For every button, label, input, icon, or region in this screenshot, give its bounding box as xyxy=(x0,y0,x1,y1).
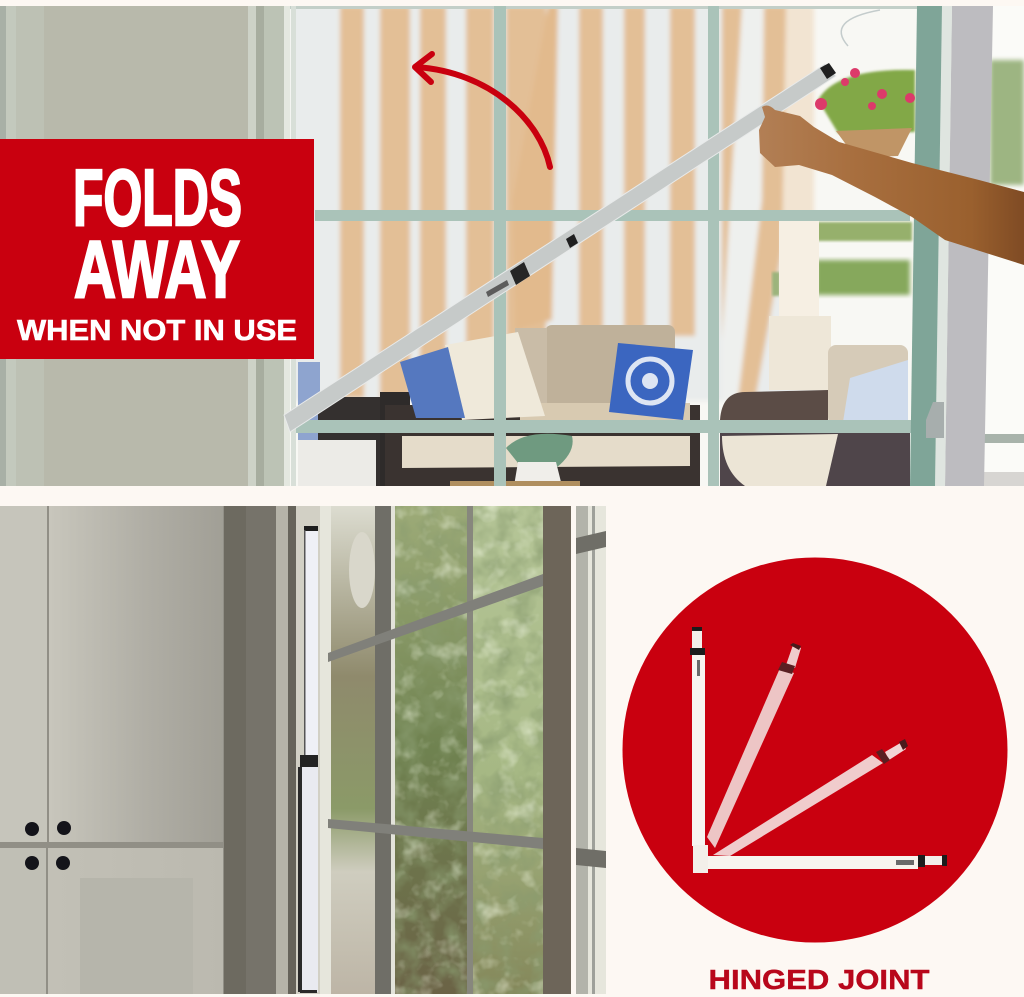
striped curtains xyxy=(292,6,814,401)
window muntins xyxy=(290,6,932,486)
distant garden xyxy=(772,222,912,296)
label: hinged joint: HINGED JOINT xyxy=(708,964,930,995)
window foliage xyxy=(331,506,606,994)
blue pillow left xyxy=(400,347,465,418)
potted plant xyxy=(450,434,580,486)
ghost bar at 70 degrees xyxy=(707,643,801,848)
window muntins xyxy=(328,506,606,994)
panel: top photo of folding bar on patio door xyxy=(0,6,1024,486)
door frame xyxy=(224,506,331,994)
horizontal bar xyxy=(706,855,947,869)
right chair xyxy=(720,345,910,486)
latch bracket xyxy=(926,402,944,438)
hand and arm xyxy=(759,106,1024,265)
callout: folds away banner xyxy=(0,139,314,359)
vertical bar xyxy=(690,627,705,846)
blue pillow right xyxy=(609,343,693,420)
folded bar xyxy=(298,526,318,993)
hanging flower basket xyxy=(815,10,915,158)
callout: folds away banner: FOLDS xyxy=(73,153,242,242)
center sofa xyxy=(385,325,700,486)
patio view behind glass xyxy=(290,6,920,486)
callout: folds away banner: WHEN NOT IN USE xyxy=(17,315,297,347)
left chair xyxy=(298,362,410,486)
wall and door frame xyxy=(0,6,290,486)
right door frame xyxy=(910,6,1024,486)
ghost bar at 30 degrees xyxy=(713,739,908,856)
callout: folds away banner: AWAY xyxy=(74,225,240,315)
folding bar raised xyxy=(284,63,836,432)
panel: hinged joint diagram xyxy=(606,490,1024,997)
porch column xyxy=(769,215,831,390)
arrow: curved fold direction xyxy=(415,54,550,167)
hinge xyxy=(693,845,708,873)
cabinets xyxy=(0,506,226,994)
panel: bottom photo of bar folded against door xyxy=(0,506,606,994)
red circle xyxy=(622,558,1008,942)
